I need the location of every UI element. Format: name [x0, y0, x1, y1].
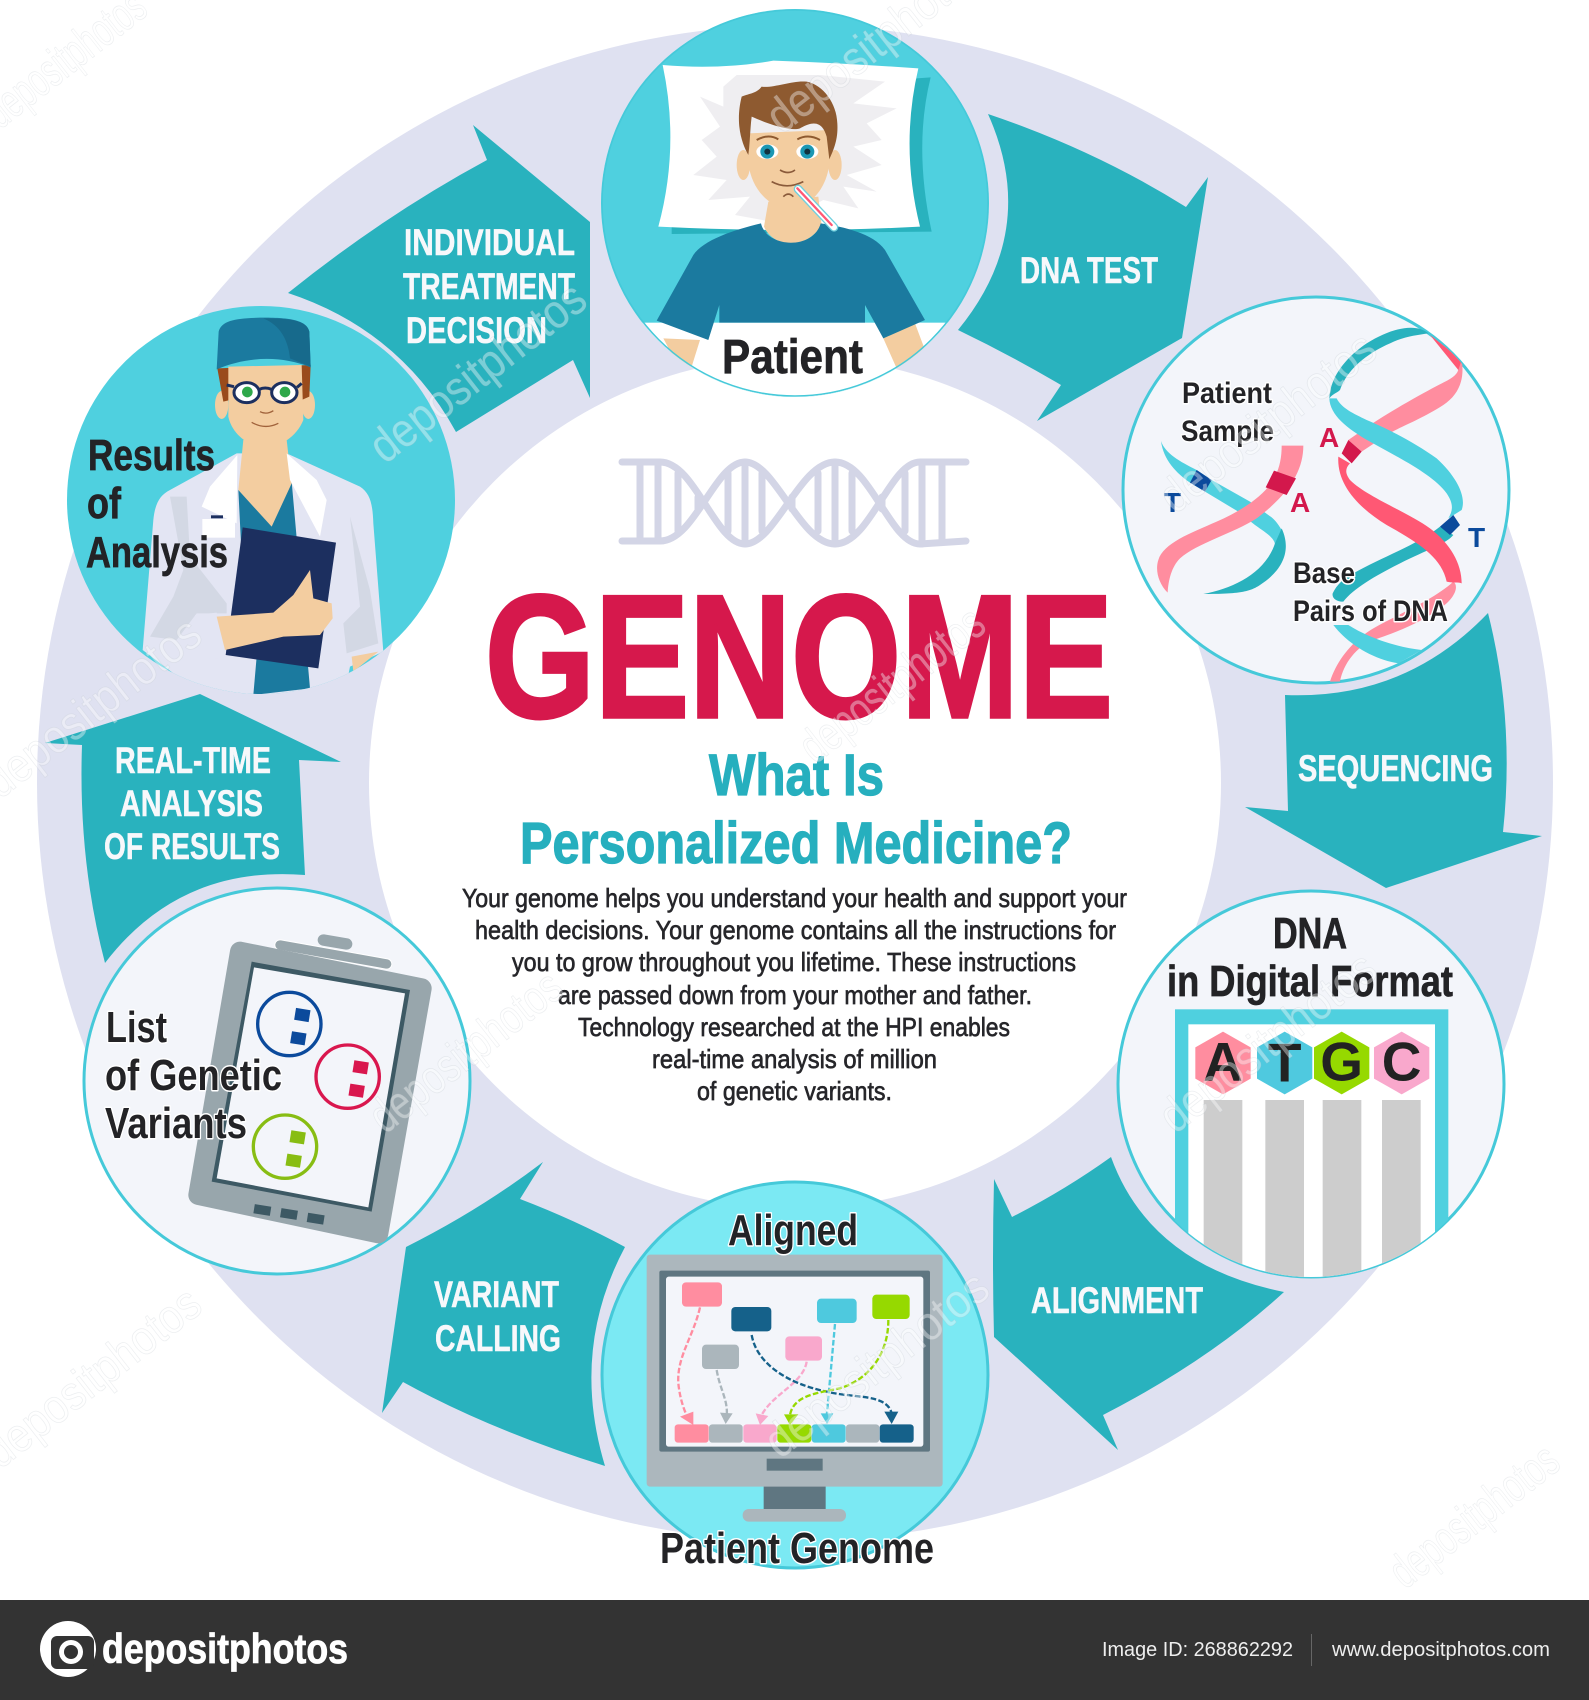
panel: patient sample and base pairs: A — [1290, 487, 1310, 518]
panel: list of genetic variants: Variants — [105, 1099, 247, 1148]
panel: results of analysis: Results — [88, 431, 215, 480]
arrow: sequencing — [1245, 613, 1542, 888]
title: GENOME — [485, 560, 1113, 755]
text block: description: you to grow throughout you lifetime. These instructions — [512, 947, 1076, 977]
subtitle: What Is — [709, 743, 884, 808]
text block: description: Technology researched at the HPI enables — [578, 1012, 1010, 1042]
icon: DNA helix — [622, 462, 966, 544]
arrow: DNA test — [958, 114, 1208, 421]
text block: description: health decisions. Your genome contains all the instructions for — [475, 915, 1116, 945]
panel: patient sample and base pairs: T — [1164, 487, 1181, 518]
panel: list of genetic variants — [84, 888, 470, 1274]
panel: DNA in digital format — [1118, 891, 1504, 1291]
icon: sequencer frame — [1175, 1009, 1448, 1291]
subtitle — [520, 743, 1072, 876]
arrow: sequencing: SEQUENCING — [1298, 748, 1493, 789]
icon: monitor — [647, 1255, 943, 1522]
panel: results of analysis: of — [87, 479, 121, 528]
icon: ATGC hexagons: G — [1320, 1031, 1363, 1093]
panel: patient sample and base pairs: Sample — [1181, 415, 1274, 448]
text block: description: real-time analysis of million — [652, 1044, 937, 1074]
arrow: variant calling: CALLING — [435, 1318, 561, 1359]
panel: patient sample and base pairs: Base — [1293, 557, 1355, 590]
icon: patient figure — [764, 197, 822, 243]
panel: aligned patient genome — [602, 1182, 988, 1573]
footer bar: depositphotos — [102, 1625, 348, 1672]
panel: patient sample and base pairs — [1123, 297, 1509, 683]
panel: aligned patient genome: Aligned — [728, 1206, 858, 1255]
panel: patient — [601, 9, 989, 403]
arrow: variant calling: VARIANT — [434, 1274, 559, 1315]
icon: ATGC hexagons: A — [1203, 1031, 1243, 1093]
watermarks: depositphotos — [754, 1261, 1000, 1469]
text block: description: are passed down from your mother and father. — [558, 980, 1032, 1010]
panel: list of genetic variants: List — [106, 1003, 167, 1052]
arrow: variant calling — [382, 1162, 625, 1466]
icon: doctor — [143, 318, 383, 698]
icon: thermometer — [797, 188, 834, 227]
footer bar: Image ID: 268862292 — [1102, 1639, 1293, 1661]
icon: ATGC hexagons: T — [1268, 1032, 1301, 1094]
icon: ATGC hexagons: C — [1382, 1031, 1422, 1093]
icon: DNA double helix — [1329, 328, 1463, 682]
icon: tablet — [198, 940, 422, 1233]
panel: results of analysis: Analysis — [86, 528, 228, 577]
text block: description — [462, 883, 1127, 1106]
arrow: real-time analysis of results: ANALYSIS — [120, 783, 263, 824]
arrow: real-time analysis of results: REAL-TIME — [115, 740, 271, 781]
footer bar — [0, 1600, 1589, 1700]
panel: results of analysis — [67, 306, 455, 698]
panel: DNA in digital format: in Digital Format — [1167, 957, 1453, 1006]
arrow: real-time analysis of results: OF RESULTS — [104, 826, 280, 867]
watermarks: depositphotos — [1149, 942, 1387, 1144]
icon: ATGC hexagons — [1195, 1031, 1429, 1094]
panel: aligned patient genome: Patient Genome — [660, 1524, 934, 1573]
icon: pillow — [658, 61, 920, 230]
arrow: alignment: ALIGNMENT — [1031, 1280, 1203, 1321]
watermarks: depositphotos — [1149, 322, 1387, 524]
watermarks: depositphotos — [789, 596, 995, 774]
watermarks: depositphotos — [359, 960, 573, 1144]
arrow: alignment — [993, 1157, 1284, 1450]
arrow: DNA test: DNA TEST — [1020, 250, 1158, 291]
panel: patient sample and base pairs: Patient — [1182, 377, 1272, 410]
arrow: individual treatment decision: DECISION — [406, 310, 547, 351]
arrow: real-time analysis of results — [45, 694, 341, 963]
arrow: individual treatment decision — [288, 125, 590, 432]
text block: description: Your genome helps you understand your health and support your — [462, 883, 1127, 913]
panel: patient sample and base pairs: A — [1319, 422, 1339, 453]
icon: depositphotos logo — [40, 1621, 96, 1677]
watermarks: depositphotos — [359, 272, 597, 474]
panel: patient: Patient — [722, 331, 863, 384]
panel: list of genetic variants: of Genetic — [105, 1051, 282, 1100]
panel: patient sample and base pairs: Pairs of DNA — [1293, 595, 1448, 628]
footer bar: www.depositphotos.com — [1331, 1639, 1550, 1661]
arrow: individual treatment decision: INDIVIDUAL — [404, 222, 575, 263]
panel: DNA in digital format: DNA — [1273, 909, 1347, 958]
subtitle: Personalized Medicine? — [520, 811, 1072, 876]
arrow: individual treatment decision: TREATMENT — [403, 266, 575, 307]
text block: description: of genetic variants. — [697, 1076, 892, 1106]
panel: patient sample and base pairs: T — [1468, 522, 1485, 553]
icon: sample DNA strands — [1157, 441, 1303, 594]
